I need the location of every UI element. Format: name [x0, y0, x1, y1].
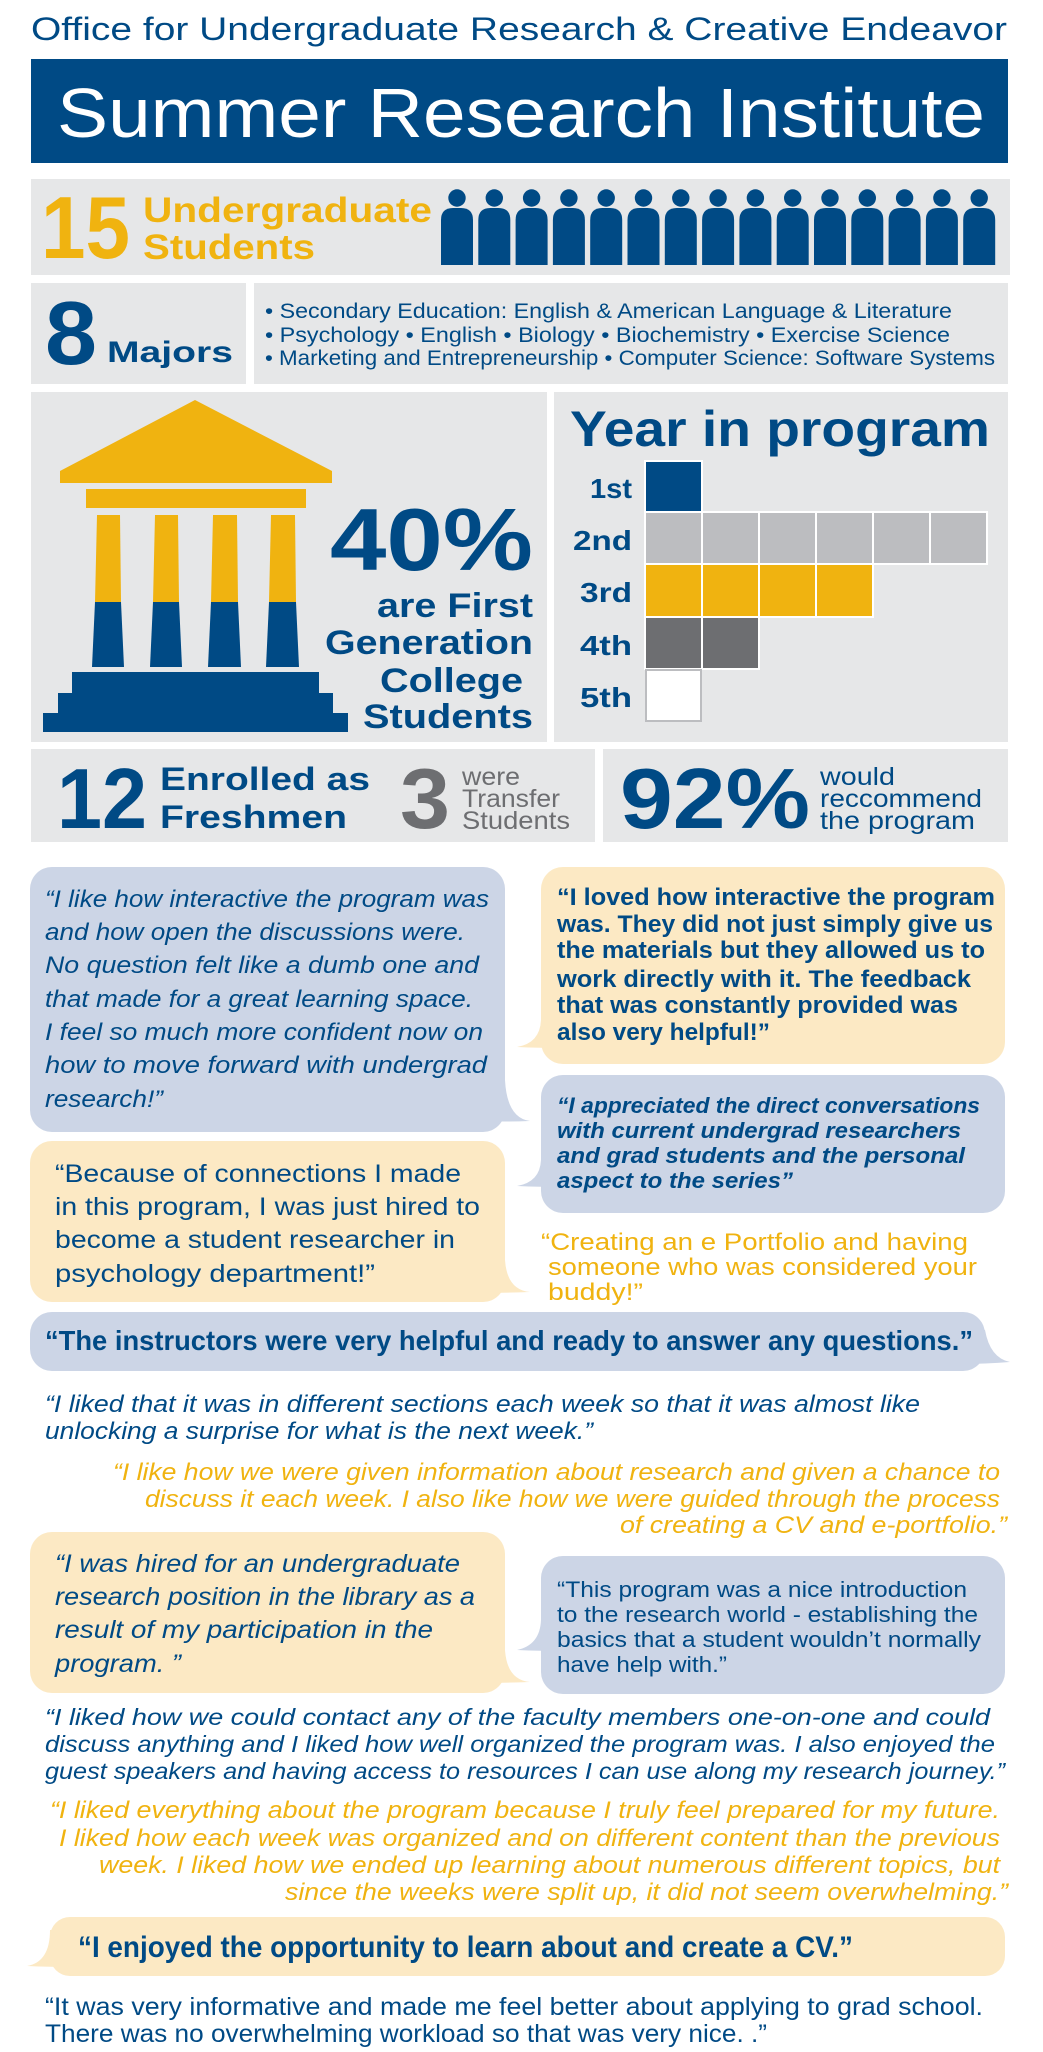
callout: direct conversations: aspect to the series” — [557, 1168, 793, 1193]
chart: year grid: 1st — [590, 473, 632, 504]
callout: nice introduction — [517, 1556, 1005, 1694]
callout: connections hired: psychology department!” — [55, 1260, 375, 1288]
callout: nice introduction: have help with.” — [557, 1652, 727, 1677]
text block: faculty members: discuss anything and I liked how well organized the program was. I also enjoyed the — [45, 1731, 995, 1757]
panel: enrolled and transfer: Transfer — [462, 785, 560, 813]
callout: interactive discussions: that made for a great learning space. — [45, 986, 473, 1013]
panel: students: Students — [143, 228, 315, 267]
callout: interactive discussions: I feel so much more confident now on — [45, 1019, 483, 1046]
callout: library position: “I was hired for an undergraduate — [55, 1550, 460, 1578]
panel: enrolled and transfer — [31, 749, 595, 847]
callout: library position: research position in the library as a — [55, 1583, 475, 1611]
callout: loved interactive: was. They did not just simply give us — [556, 911, 993, 938]
chart: year grid: 4th — [580, 630, 632, 661]
callout: loved interactive: that was constantly provided was — [557, 992, 958, 1019]
text block: given information: of creating a CV and e-portfolio.” — [620, 1512, 1008, 1539]
panel: enrolled and transfer: 3 — [400, 752, 450, 847]
panel: majors list — [254, 283, 1008, 384]
callout: create a CV: “I enjoyed the opportunity to learn about and create a CV.” — [78, 1931, 853, 1964]
text block: liked everything: I liked how each week was organized and on different content than the previous — [59, 1825, 1000, 1852]
callout: direct conversations: and grad students and the personal — [557, 1143, 966, 1168]
callout: instructors helpful — [30, 1312, 1010, 1371]
panel: majors list: • Psychology • English • Biology • Biochemistry • Exercise Science — [265, 324, 950, 347]
text block: faculty members — [45, 1704, 1006, 1784]
callout: interactive discussions: “I like how interactive the program was — [45, 886, 489, 913]
title banner: Summer Research Institute — [57, 74, 985, 152]
text block: e portfolio quote: “Creating an e Portfolio and having — [541, 1229, 968, 1256]
text block: given information — [113, 1459, 1008, 1539]
callout: loved interactive: also very helpful!” — [557, 1019, 770, 1046]
text block: given information: “I like how we were given information about research and given a chance to — [113, 1459, 1000, 1486]
text block: liked everything — [50, 1797, 1009, 1906]
callout: interactive discussions: how to move forward with undergrad — [45, 1052, 488, 1079]
text block: faculty members: “I liked how we could contact any of the faculty members one-on-one and could — [45, 1704, 991, 1730]
text block: different sections: unlocking a surprise for what is the next week.” — [45, 1418, 594, 1445]
icon: temple — [43, 400, 348, 732]
callout: connections hired: become a student researcher in — [55, 1226, 455, 1254]
panel: recommend: would — [819, 763, 895, 791]
callout: interactive discussions — [30, 867, 530, 1132]
title banner — [31, 59, 1008, 163]
text block: e portfolio quote: buddy!” — [548, 1279, 643, 1306]
callout: loved interactive: the materials but they allowed us to — [557, 937, 985, 964]
panel: enrolled and transfer: Students — [462, 807, 570, 835]
callout: nice introduction: to the research world - establishing the — [557, 1602, 978, 1627]
text block: grad school: There was no overwhelming workload so that was very nice. .” — [45, 2020, 767, 2048]
panel: majors list: • Secondary Education: English & American Language & Literature — [265, 300, 952, 323]
callout: direct conversations — [517, 1075, 1005, 1213]
callout: direct conversations: with current undergrad researchers — [557, 1118, 961, 1143]
callout: connections hired — [30, 1141, 530, 1302]
panel: first generation: Students — [363, 698, 533, 736]
panel: recommend: the program — [820, 807, 975, 835]
panel: recommend: 92% — [620, 752, 810, 847]
text block: e portfolio quote: someone who was considered your — [548, 1254, 977, 1281]
panel: students: Undergraduate — [143, 191, 432, 230]
panel: first generation — [31, 392, 547, 742]
text block: liked everything: week. I liked how we ended up learning about numerous different topics, but — [99, 1852, 1001, 1879]
header text: Office for Undergraduate Research & Creative Endeavor — [31, 11, 1007, 47]
panel: students: 15 — [41, 178, 130, 277]
panel: enrolled and transfer: were — [461, 763, 520, 791]
text block: liked everything: since the weeks were split up, it did not seem overwhelming.” — [285, 1879, 1009, 1906]
panel: year in program — [554, 392, 1008, 742]
callout: nice introduction: basics that a student wouldn’t normally — [557, 1627, 981, 1652]
text block: different sections — [45, 1391, 920, 1445]
callout: interactive discussions: and how open the discussions were. — [45, 919, 465, 946]
callout: loved interactive: work directly with it. The feedback — [556, 966, 972, 993]
panel: students — [31, 178, 1010, 277]
panel: year in program: Year in program — [570, 401, 990, 457]
panel: recommend: reccommend — [820, 785, 982, 813]
callout: nice introduction: “This program was a nice introduction — [557, 1577, 967, 1602]
icon: 15 people — [441, 189, 995, 265]
panel: first generation: are First — [377, 587, 533, 625]
callout: direct conversations: “I appreciated the direct conversations — [557, 1093, 980, 1118]
chart: year grid: 5th — [580, 682, 632, 713]
chart: year grid — [573, 461, 987, 721]
callout: connections hired: “Because of connections I made — [55, 1160, 461, 1188]
panel: majors count — [31, 283, 246, 384]
panel: enrolled and transfer: Freshmen — [160, 799, 347, 835]
text block: different sections: “I liked that it was in different sections each week so that it was almost like — [45, 1391, 920, 1418]
text block: given information: discuss it each week. I also like how we were guided through the process — [145, 1486, 1000, 1513]
panel: enrolled and transfer: 12 — [57, 752, 147, 847]
text block: grad school: “It was very informative and made me feel better about applying to grad school. — [45, 1993, 983, 2021]
panel: first generation: 40% — [330, 490, 533, 589]
panel: majors count: 8 — [45, 284, 97, 384]
callout: create a CV — [27, 1917, 1005, 1976]
panel: first generation: College — [380, 662, 523, 700]
callout: interactive discussions: research!” — [45, 1086, 164, 1113]
callout: library position: result of my participation in the — [55, 1616, 433, 1644]
text block: e portfolio quote — [541, 1229, 977, 1306]
text block: liked everything: “I liked everything about the program because I truly feel prepared for my future. — [50, 1797, 1000, 1824]
panel: enrolled and transfer: Enrolled as — [160, 761, 370, 797]
text block: faculty members: guest speakers and having access to resources I can use along my research journey.” — [45, 1758, 1006, 1784]
panel: first generation: Generation — [325, 624, 533, 662]
panel: majors count: Majors — [107, 336, 233, 369]
panel: majors list: • Marketing and Entrepreneurship • Computer Science: Software Systems — [265, 347, 995, 370]
callout: library position: program. ” — [54, 1650, 183, 1678]
chart: year grid: 3rd — [580, 577, 632, 608]
callout: loved interactive — [517, 867, 1005, 1064]
callout: instructors helpful: “The instructors were very helpful and ready to answer any questions.” — [45, 1325, 973, 1356]
callout: loved interactive: “I loved how interactive the program — [557, 884, 995, 911]
text block: grad school — [45, 1993, 983, 2048]
panel: recommend — [603, 749, 1008, 847]
callout: interactive discussions: No question felt like a dumb one and — [45, 952, 480, 979]
callout: library position — [30, 1532, 530, 1693]
chart: year grid: 2nd — [573, 525, 632, 556]
callout: connections hired: in this program, I was just hired to — [55, 1193, 480, 1221]
